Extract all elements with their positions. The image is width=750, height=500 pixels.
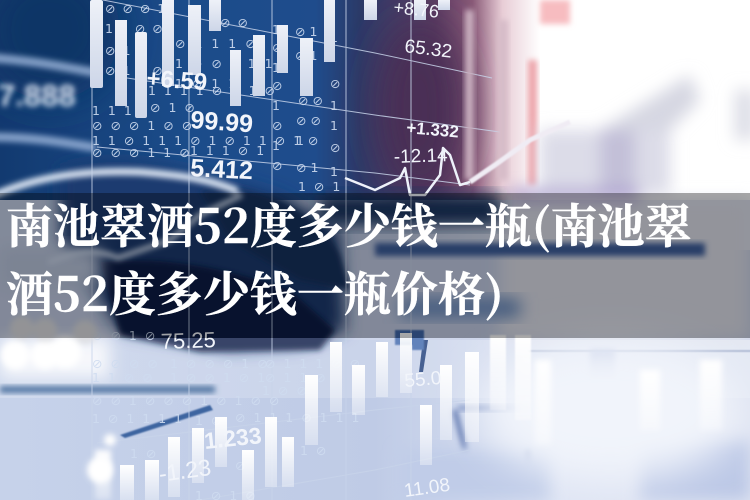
digit matrix: 1 bbox=[272, 98, 280, 113]
chart value labels: 5.412 bbox=[190, 154, 254, 185]
digit matrix: 1 bbox=[272, 138, 280, 153]
top candlestick bars bbox=[90, 0, 450, 118]
digit matrix: ⊘ bbox=[330, 140, 340, 155]
digit matrix: ⊘ bbox=[272, 118, 282, 133]
digit matrix: 1 1 1 1 ⊘ ⊘ 1 ⊘ bbox=[148, 83, 275, 98]
digit matrix: 1 ⊘ ⊘ 1 ⊘ 1 bbox=[170, 370, 265, 385]
digit matrix: 1 bbox=[272, 22, 280, 37]
digit matrix: ⊘ bbox=[235, 458, 245, 473]
digit matrix: ⊘ ⊘ bbox=[220, 15, 248, 30]
digit matrix: ⊘ ⊘ ⊘ 1 bbox=[105, 1, 165, 16]
digit matrix: ⊘ ⊘ bbox=[298, 93, 323, 108]
chart value labels: +1.332 bbox=[406, 118, 460, 142]
chart value labels: 65.32 bbox=[403, 36, 453, 63]
digit matrix: 1 bbox=[272, 60, 280, 75]
blurred streak lines at left bbox=[0, 58, 240, 262]
digit matrix: ⊘ 1 1 1 ⊘ ⊘ bbox=[265, 356, 360, 371]
digit matrix: ⊘ 1 1 ⊘ bbox=[265, 370, 326, 385]
digit matrix bbox=[92, 1, 360, 500]
digit matrix: ⊘ 1 1 ⊘ bbox=[105, 63, 163, 78]
digit matrix: 1 bbox=[330, 118, 338, 133]
digit matrix: 1 ⊘ 1 1 1 1 bbox=[92, 411, 182, 426]
digit matrix: 1 ⊘ 1 1 bbox=[175, 76, 236, 91]
digit matrix: 1 ⊘ ⊘ bbox=[262, 383, 307, 398]
chart value labels bbox=[146, 0, 460, 500]
digit matrix: 1 ⊘ bbox=[300, 443, 326, 458]
grid lines bbox=[92, 0, 500, 500]
chart value labels: 55.0 bbox=[404, 368, 442, 392]
blurred right-side hand and chart shapes bbox=[510, 75, 750, 200]
digit matrix: 1 ⊘ bbox=[130, 446, 156, 461]
digit matrix: ⊘ 1 ⊘ bbox=[150, 100, 195, 115]
dark hand and sleeve bbox=[0, 162, 705, 378]
chart value labels: +6.59 bbox=[146, 65, 208, 96]
digit matrix: 1 1 ⊘ ⊘ bbox=[92, 370, 153, 385]
digit matrix: 1 1 ⊘ 1 1 1 ⊘ 1 ⊘ 1 1 ⊘ 1 bbox=[92, 133, 301, 148]
blurred left number: 7.888 bbox=[0, 78, 76, 113]
price line chart bbox=[345, 122, 570, 195]
digit matrix: ⊘ ⊘ ⊘ 1 1 ⊘ bbox=[92, 145, 190, 160]
digit matrix: ⊘ bbox=[272, 158, 282, 173]
digit matrix: ⊘ 1 bbox=[295, 24, 317, 39]
digit matrix: ⊘ bbox=[330, 76, 340, 91]
chart value labels: -1.23 bbox=[157, 454, 213, 487]
digit matrix: ⊘ 1 1 1 ⊘ 1 1 1 bbox=[235, 410, 359, 425]
digit matrix: ⊘ 1 1 1 ⊘ bbox=[175, 36, 256, 51]
digit matrix: 1 bbox=[330, 164, 338, 179]
chart value labels: -12.14 bbox=[393, 145, 448, 168]
title bbox=[6, 190, 692, 325]
digit matrix: ⊘ 1 bbox=[296, 160, 318, 175]
chart value labels: 75.25 bbox=[160, 327, 216, 354]
digit matrix: ⊘ 1 bbox=[295, 48, 317, 63]
digit matrix: 1 1 ⊘ ⊘ bbox=[105, 21, 163, 36]
blurred large circles lower left bbox=[1, 316, 116, 483]
title: 酒52度多少钱一瓶价格) bbox=[6, 258, 504, 325]
digit matrix: 1 ⊘ bbox=[296, 133, 318, 148]
digit matrix: ⊘ ⊘ bbox=[296, 113, 321, 128]
digit matrix: ⊘ ⊘ 1 ⊘ ⊘ ⊘ 1 ⊘ 1 ⊘ ⊘ bbox=[92, 393, 279, 408]
digit matrix: 1 ⊘ 1 bbox=[298, 179, 340, 194]
digit matrix: 1 bbox=[330, 98, 338, 113]
digit matrix: ⊘ ⊘ ⊘ 1 ⊘ ⊘ bbox=[92, 118, 192, 133]
digit matrix: 1 ⊘ ⊘ 1 1 1 bbox=[175, 56, 273, 71]
pale dotted column and faint bars at upper right bbox=[465, 10, 508, 180]
digit matrix: ⊘ bbox=[272, 40, 282, 55]
digit matrix: 1 ⊘ ⊘ ⊘ 1 ⊘ bbox=[170, 356, 268, 371]
title: 南池翠酒52度多少钱一瓶(南池翠 bbox=[6, 190, 692, 257]
pale pen and paper marks in lower half bbox=[0, 330, 750, 500]
digit matrix: 1 1 1 bbox=[92, 103, 132, 118]
digit matrix: ⊘ 1 1 bbox=[105, 43, 145, 58]
digit matrix: ⊘ bbox=[272, 78, 282, 93]
title band bbox=[0, 193, 750, 338]
digit matrix: 1 1 1 ⊘ 1 bbox=[190, 143, 264, 158]
digit matrix: ⊘ ⊘ ⊘ ⊘ bbox=[92, 356, 158, 371]
bottom bars bbox=[95, 333, 722, 500]
digit matrix: ⊘ ⊘ 1 ⊘ bbox=[92, 328, 155, 343]
chart value labels: 1.233 bbox=[203, 422, 263, 454]
digit matrix: 1 bbox=[330, 30, 338, 45]
chart value labels: 99.99 bbox=[190, 106, 254, 138]
digit matrix: 1 ⊘ bbox=[195, 413, 221, 428]
